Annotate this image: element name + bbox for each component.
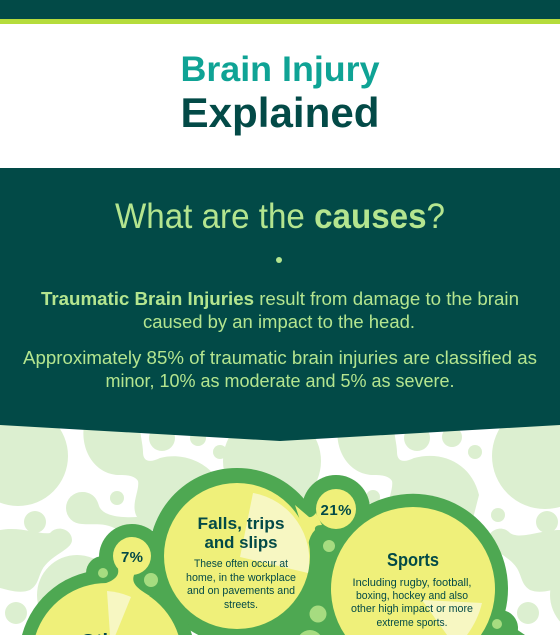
bubble: falls, trips and slips xyxy=(164,483,322,629)
bubble cluster outline xyxy=(22,468,525,635)
sports text: extreme sports. xyxy=(376,617,448,629)
falls text: These often occur at xyxy=(194,558,288,570)
bubble: 7 percent xyxy=(95,537,151,596)
title: Explained xyxy=(180,89,380,136)
sports text: boxing, hockey and also xyxy=(356,590,468,602)
falls heading: Falls, trips xyxy=(198,514,284,533)
title xyxy=(180,50,380,136)
falls text: home, in the workplace xyxy=(186,572,296,584)
sports text: other high impact or more xyxy=(351,603,473,615)
falls text: and on pavements and xyxy=(187,585,295,597)
dot xyxy=(300,630,320,635)
sports text xyxy=(351,577,473,629)
dot xyxy=(98,568,108,578)
falls text xyxy=(186,558,296,611)
falls text: streets. xyxy=(224,599,258,611)
intro text xyxy=(23,289,537,391)
intro text: Approximately 85% of traumatic brain injuries are classified as xyxy=(23,348,537,368)
falls heading xyxy=(198,514,284,552)
dot xyxy=(492,619,502,629)
dot xyxy=(323,540,335,552)
bubble: other xyxy=(36,583,178,635)
top band xyxy=(0,0,560,24)
pie wedge xyxy=(107,591,131,635)
intro text: caused by an impact to the head. xyxy=(143,312,415,332)
bubble: sports xyxy=(331,507,495,635)
pie wedge xyxy=(422,600,482,635)
intro text: minor, 10% as moderate and 5% as severe. xyxy=(106,371,454,391)
intro text: Traumatic Brain Injuries result from damage to the brain xyxy=(41,289,519,309)
sports text: Including rugby, football, xyxy=(352,577,472,589)
dot divider xyxy=(276,257,282,263)
bubble: 21 percent: 21% xyxy=(320,502,352,519)
pie wedge xyxy=(240,493,309,573)
causes heading: What are the causes? xyxy=(115,197,445,236)
falls heading: and slips xyxy=(204,533,278,552)
title: Brain Injury xyxy=(180,50,380,89)
background blobs xyxy=(0,403,560,635)
dot xyxy=(310,606,326,622)
dot xyxy=(144,573,158,587)
bubble: 21 percent xyxy=(316,489,356,529)
sports heading: Sports xyxy=(387,550,439,570)
bubble: 7 percent: 7% xyxy=(121,549,143,566)
